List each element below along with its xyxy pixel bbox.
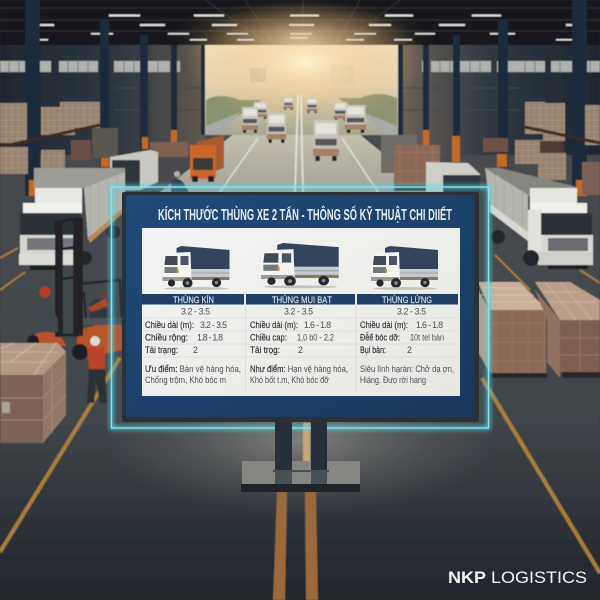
orange truck <box>190 135 224 182</box>
column 1: thùng kín: Chống trộm, Khó bóc m <box>145 375 226 385</box>
wall windows <box>0 61 600 72</box>
table grid <box>142 305 458 392</box>
road markings <box>220 95 378 192</box>
column 3: thùng lửng: THÙNG LỬNG <box>382 294 432 305</box>
worker with red hard hat <box>36 286 58 332</box>
column 1: thùng kín <box>142 294 244 385</box>
forklift <box>27 218 122 360</box>
ceiling lights <box>36 14 574 41</box>
road <box>150 133 440 230</box>
column 2: thùng mui bạt: Chiều dài (m): <box>250 320 298 330</box>
cargo truck with crates <box>381 135 440 191</box>
column 2: thùng mui bạt: THÙNG MUI BẠT <box>272 295 332 305</box>
ceiling trusses <box>0 0 600 45</box>
column 2: thùng mui bạt <box>246 294 355 385</box>
truck image: thùng lửng <box>371 246 438 290</box>
back wall left <box>0 45 205 155</box>
floor <box>0 130 600 600</box>
distant road trucks <box>242 97 366 161</box>
column 3: thùng lửng: 2 <box>407 345 412 355</box>
column 3: thùng lửng: 1.6 - 1.8 <box>416 320 443 330</box>
column 3: thùng lửng: Chiều dài (m): <box>360 320 408 330</box>
column 2: thùng mui bạt: Tải trọg: <box>250 345 280 355</box>
steel columns <box>25 0 587 196</box>
column 2: thùng mui bạt: 1.6 - 1.8 <box>304 320 331 330</box>
floor light pool <box>100 365 500 515</box>
worker in orange vest <box>87 336 107 403</box>
glowing cyan frame <box>112 187 488 428</box>
column 2: thùng mui bạt: Chiều cap: <box>250 332 287 342</box>
column 3: thùng lửng: 10t tel bàn <box>410 332 444 342</box>
window mullions and wall panels <box>9 60 590 73</box>
ceiling <box>0 0 600 45</box>
orange column bases <box>29 130 587 196</box>
truck image: thùng kín <box>162 246 230 290</box>
floor lane lines <box>0 248 600 573</box>
white van left <box>110 150 158 190</box>
left storage racks <box>0 102 188 177</box>
column 1: thùng kín: 3.2 - 3.5 <box>200 320 227 330</box>
open door with hazy sky <box>185 2 425 135</box>
back wall right <box>398 45 600 155</box>
distant worker <box>171 171 189 192</box>
white van right <box>426 162 480 192</box>
left big white truck <box>19 168 125 270</box>
column 2: thùng mui bạt: Khó bốt t.m, Khó bóc đỡ <box>250 375 329 385</box>
column 2: thùng mui bạt: 1,0 b0 - 2.2 <box>297 332 334 342</box>
column 3: thùng lửng: Hiáng. Đưo rời hang <box>360 375 426 385</box>
bottom lane lines <box>273 423 318 600</box>
ceiling glow <box>175 0 425 76</box>
column 1: thùng kín: 1.8 - 1.8 <box>197 332 223 342</box>
column 1: thùng kín: 2 <box>193 345 198 355</box>
column 2: thùng mui bạt: 2 <box>298 345 303 355</box>
column 1: thùng kín: THÙNG KÍN <box>173 295 214 305</box>
right box pallets <box>478 282 600 378</box>
column 3: thùng lửng: Bụi bàn: <box>360 345 386 355</box>
column 3: thùng lửng: 3.2 - 3.5 <box>397 306 426 316</box>
column 1: thùng kín: Chiều dài (m): <box>145 320 194 330</box>
right big white truck <box>485 168 593 269</box>
column 3: thùng lửng: Đễế bóc dỡ: <box>360 332 400 342</box>
brand logo text: NKP LOGISTICS <box>448 568 587 587</box>
white comparison panel <box>142 228 460 396</box>
column 3: thùng lửng: Siêu lình hạrán: Chở dạ ợn, <box>360 364 454 374</box>
monitor stand <box>241 422 360 492</box>
right storage racks <box>483 102 600 195</box>
column 1: thùng kín: Tải trạng: <box>145 345 178 355</box>
monitor screen <box>122 192 479 422</box>
column 1: thùng kín: Chiều rộng: <box>145 332 188 342</box>
column 3: thùng lửng <box>357 294 458 385</box>
column 1: thùng kín: Ưu điểm: Bàn vệ hàng hóa, <box>145 364 241 374</box>
truck image: thùng mui bạt <box>261 243 339 288</box>
column 2: thùng mui bạt: 3.2 - 3.5 <box>284 306 313 316</box>
left box pallet <box>0 343 66 443</box>
column 1: thùng kín: 3.2 - 3.5 <box>181 306 210 316</box>
column 2: thùng mui bạt: Như điểm: Hạn vệ hàng hóa, <box>250 364 348 374</box>
